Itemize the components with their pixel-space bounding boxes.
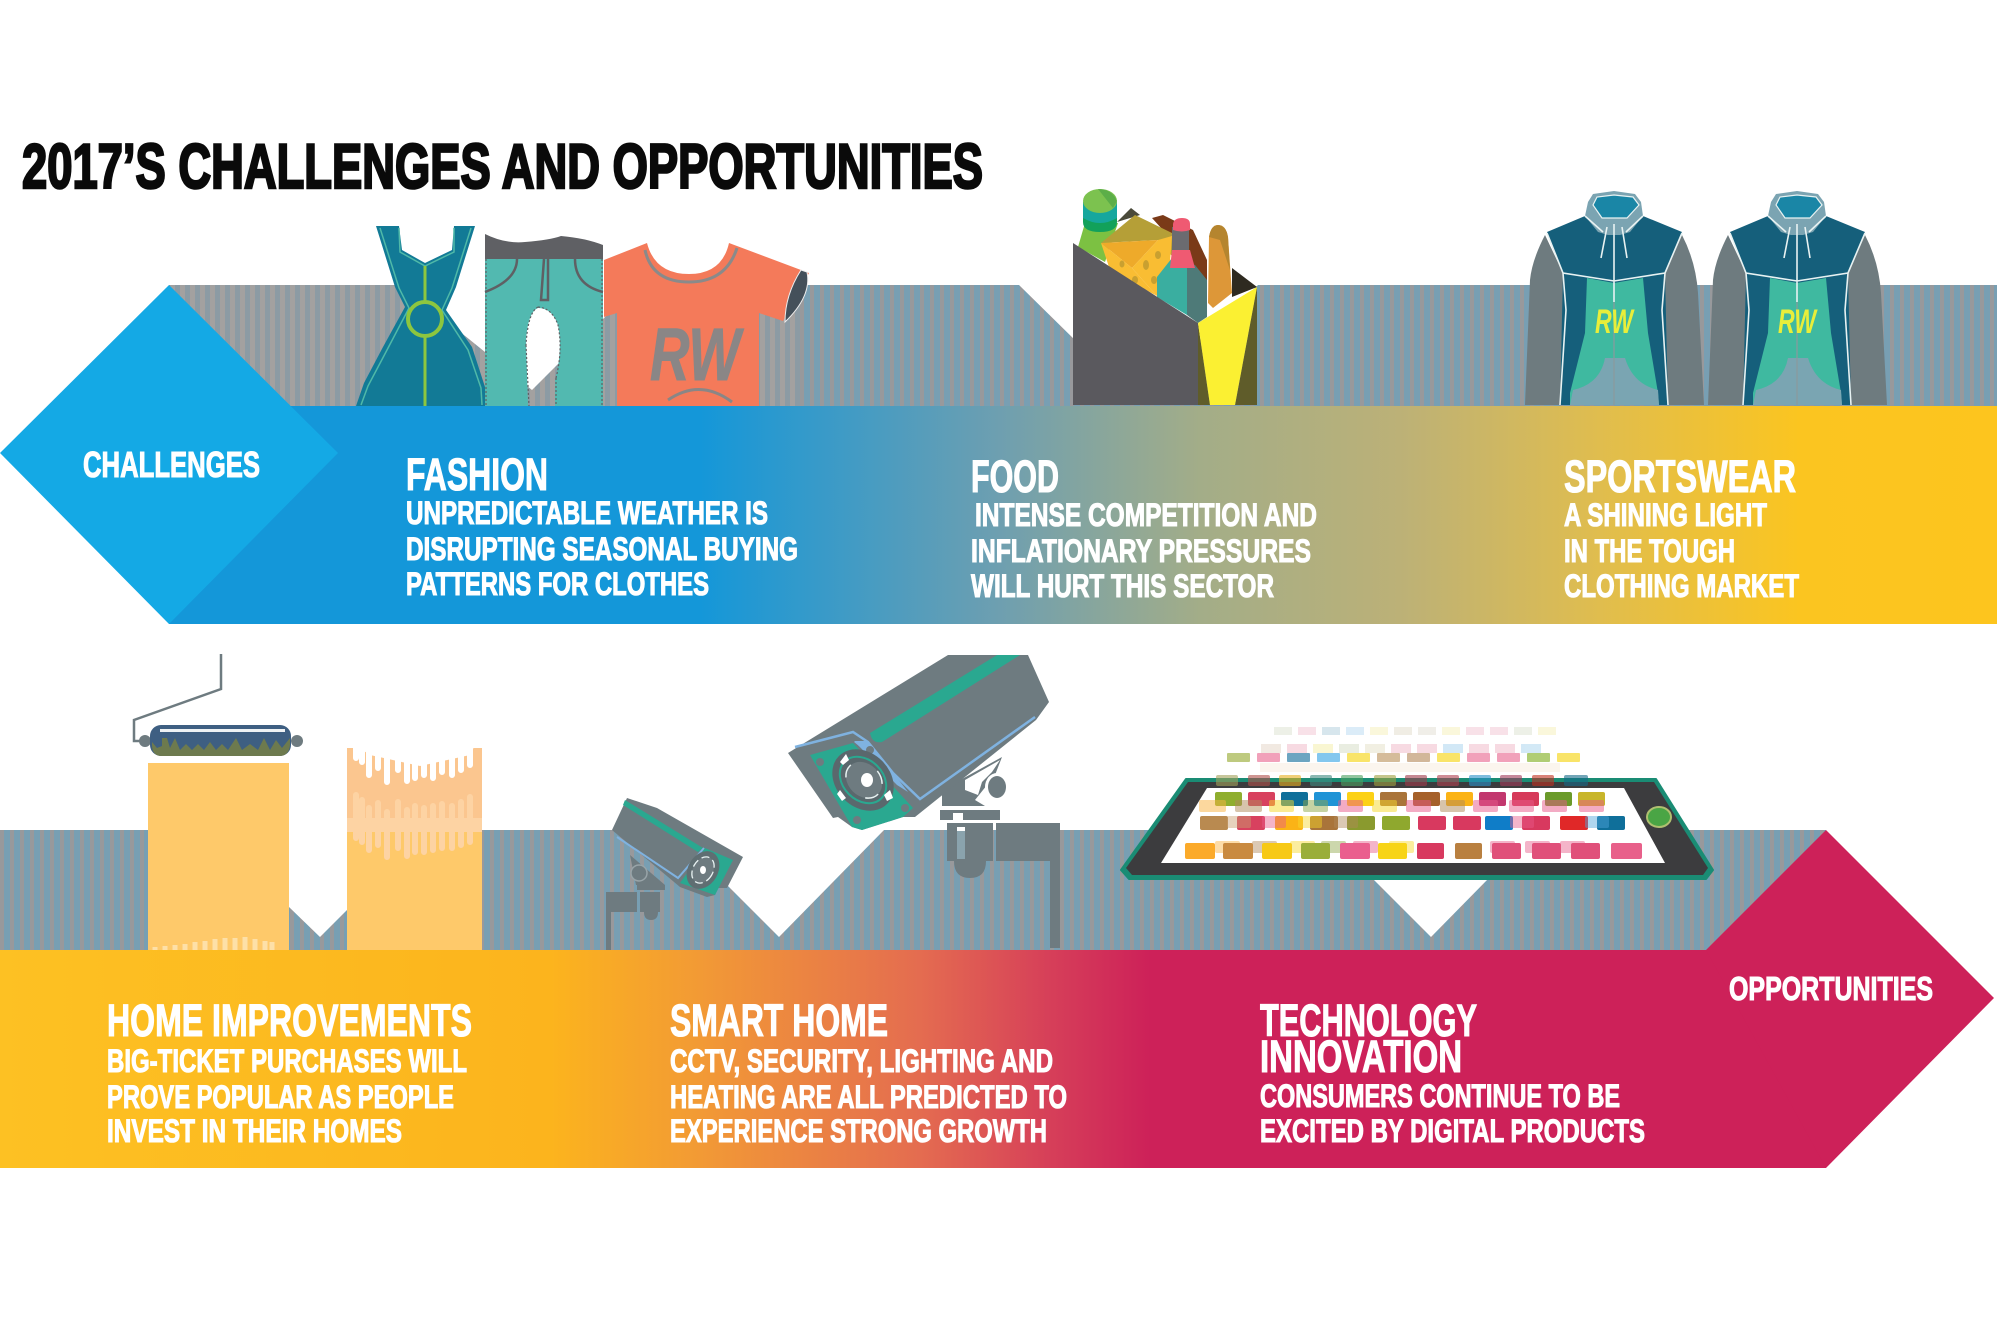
text block: sportswear: SPORTSWEAR [1564,451,1796,502]
cheese [1101,215,1172,256]
text block: food: FOOD [971,451,1059,502]
text block: technology innovation: TECHNOLOGY [1260,995,1477,1046]
text block: fashion: DISRUPTING SEASONAL BUYING [406,531,798,567]
baguette [1208,225,1232,308]
panel: challenges band [0,285,1997,624]
saturated tile row 1 [1215,792,1605,806]
icon: hoodie right: RW [1778,303,1818,341]
paint strip: drying [347,744,482,950]
tablet body [1121,779,1713,879]
text block: fashion: UNPREDICTABLE WEATHER IS [406,495,768,531]
text block: home improvements: INVEST IN THEIR HOMES [107,1113,402,1149]
text block: home improvements [107,995,472,1149]
text block: technology innovation: INNOVATION [1260,1031,1462,1082]
pale tile row [1199,800,1604,812]
wine bottle [1157,258,1187,315]
saturated tile row 3 [1185,843,1642,859]
pale tile row 3 [1215,841,1585,853]
icon: hoodie left [1525,191,1704,405]
text block: food [971,451,1317,604]
text: challenges label: CHALLENGES [83,444,260,485]
icon: t-shirt [604,243,809,406]
striped grey backdrop: opportunities [0,830,1826,950]
text block: sportswear: A SHINING LIGHT [1564,497,1767,533]
bag [1073,243,1198,405]
text block: food: INFLATIONARY PRESSURES [971,533,1311,569]
text block: fashion: PATTERNS FOR CLOTHES [406,566,709,602]
arrow: opportunities [1706,830,1994,1168]
dark wedge behind [1117,208,1140,222]
gradient band: challenges [169,406,1997,624]
text block: fashion [406,449,798,602]
text block: smart home: SMART HOME [670,995,888,1046]
text block: smart home: CCTV, SECURITY, LIGHTING AND [670,1043,1053,1079]
icon: hoodie right [1708,191,1887,405]
text block: food: WILL HURT THIS SECTOR [971,568,1274,604]
text block: technology innovation: EXCITED BY DIGITAL PRODUCTS [1260,1113,1645,1149]
text block: sportswear [1564,451,1799,604]
gradient band: opportunities [0,950,1826,1168]
text block: smart home: HEATING ARE ALL PREDICTED TO [670,1079,1067,1115]
text block: technology innovation: CONSUMERS CONTINUE TO BE [1260,1078,1620,1114]
text block: sportswear: CLOTHING MARKET [1564,568,1799,604]
text block: technology innovation [1260,995,1645,1149]
icon: tablet with coloured tiles [1121,727,1713,879]
text block: sportswear: IN THE TOUGH [1564,533,1735,569]
text block: home improvements: BIG-TICKET PURCHASES WILL [107,1043,467,1079]
icon: small CCTV camera [606,798,743,950]
icon: large CCTV camera [788,655,1060,948]
brown bread [1152,215,1207,285]
arrow: challenges [0,285,338,624]
icon: jeans [485,234,603,406]
green bottle [1078,223,1118,262]
icon: paint roller [134,654,482,950]
text: opportunities label: OPPORTUNITIES [1729,970,1933,1007]
home button [1647,807,1671,827]
text block: smart home [670,995,1067,1149]
text block: food: INTENSE COMPETITION AND [975,497,1317,533]
text block: home improvements: PROVE POPULAR AS PEOPLE [107,1079,454,1115]
icon: food bag [1073,189,1257,405]
striped grey backdrop: challenges [169,285,1997,406]
faint floating tiles [1274,727,1556,735]
paint strip: fresh [148,763,289,950]
panel: opportunities band [0,830,1994,1168]
icon: dress [356,226,485,406]
text block: smart home: EXPERIENCE STRONG GROWTH [670,1113,1047,1149]
pale overlap tiles, row 2 [1227,816,1609,828]
tile row on bezel [1216,775,1588,786]
saturated tile row 2 [1200,816,1625,830]
text block: fashion: FASHION [406,449,548,500]
title: 2017’S CHALLENGES AND OPPORTUNITIES [22,132,983,202]
text block: home improvements: HOME IMPROVEMENTS [107,995,472,1046]
icon: hoodie left: RW [1595,303,1635,341]
icon: t-shirt: RW [650,313,745,396]
